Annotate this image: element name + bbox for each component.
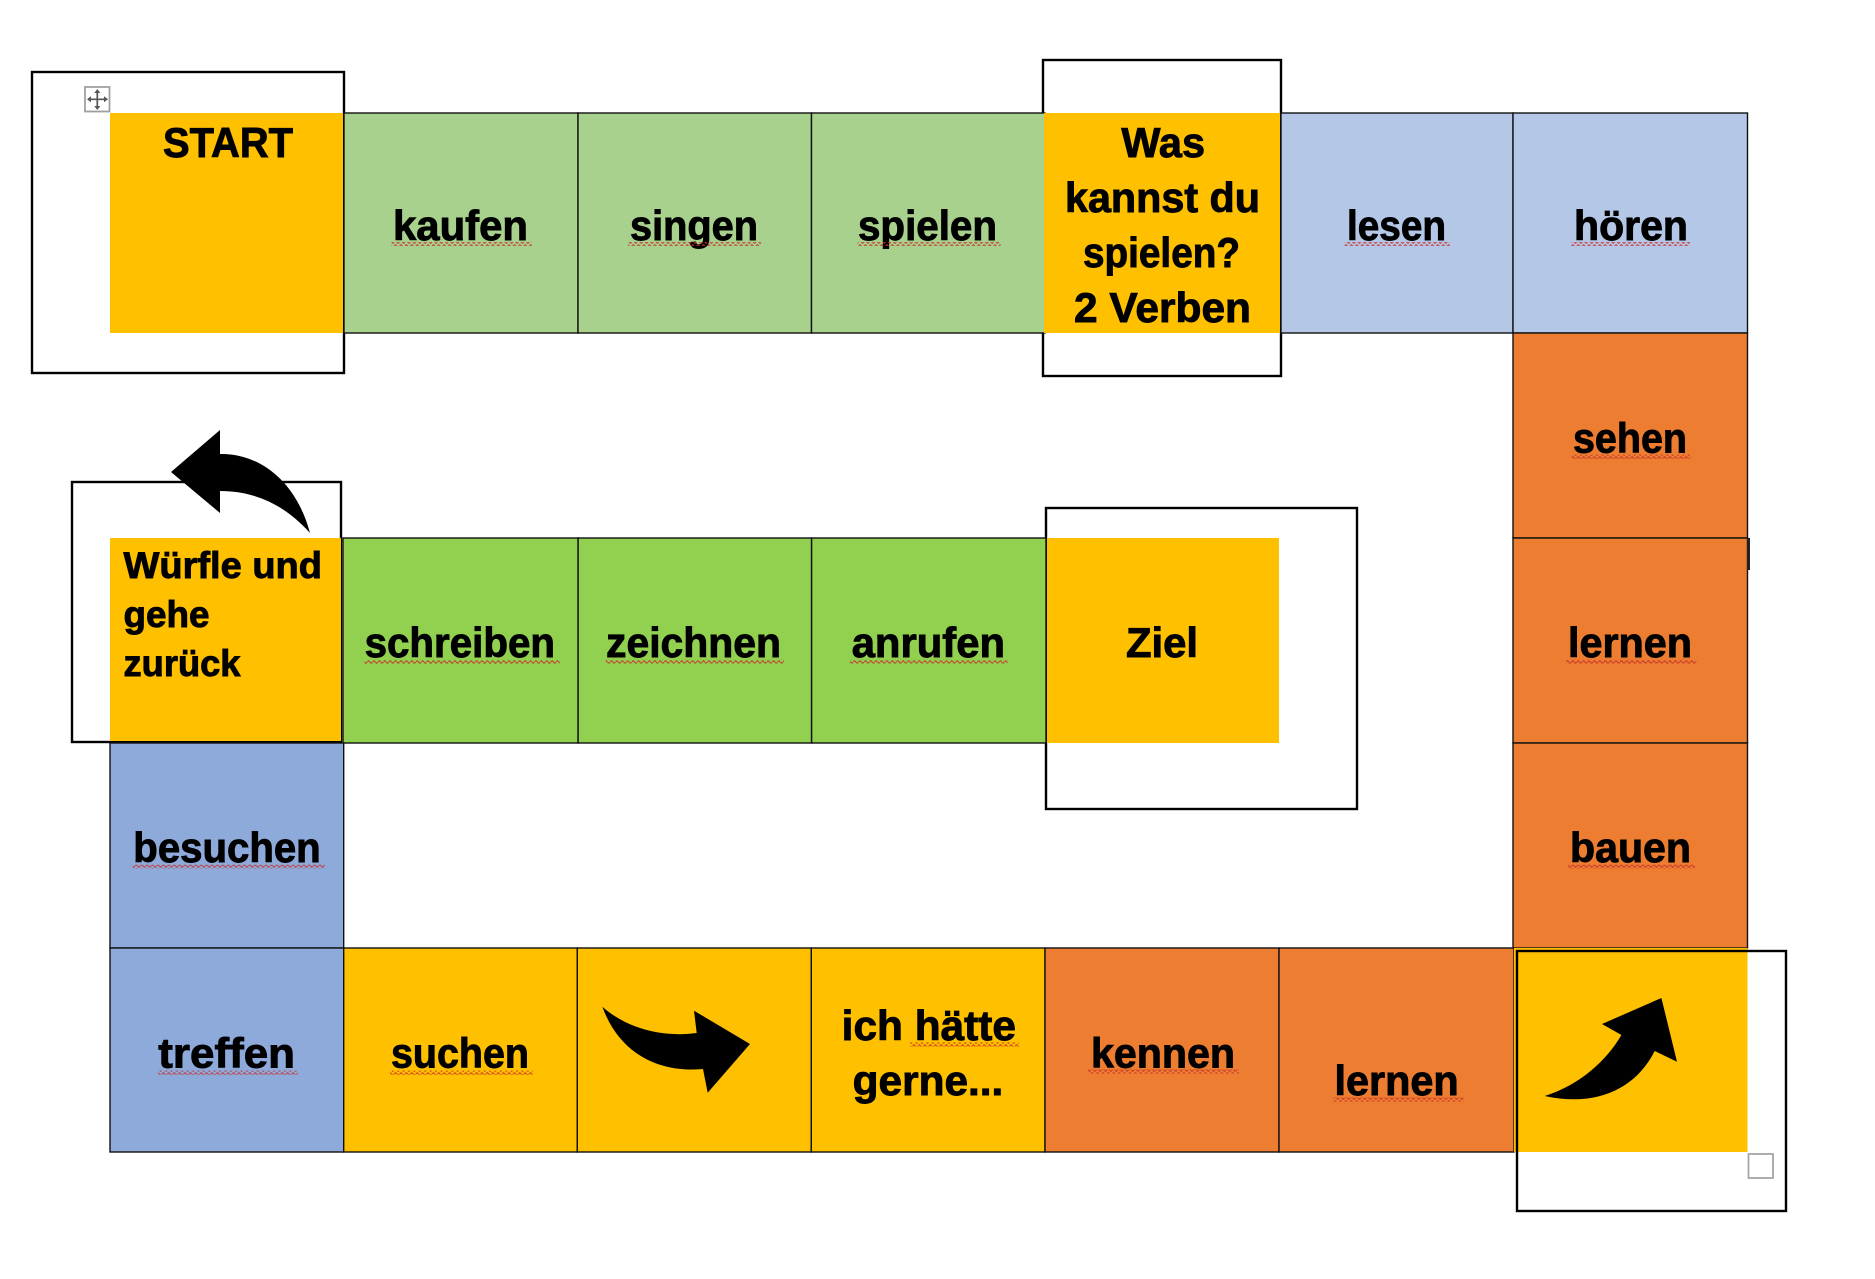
cell: Ziel: Ziel xyxy=(1126,619,1198,666)
cell: anrufen: anrufen xyxy=(852,619,1005,666)
cell: kaufen: kaufen xyxy=(393,202,528,249)
cell: singen xyxy=(578,113,812,333)
cell: Was kannst du spielen? 2 Verben: 2 Verben xyxy=(1074,284,1251,331)
cell: lernen: lernen xyxy=(1568,619,1692,666)
cell: lernen bottom: lernen xyxy=(1334,1057,1459,1104)
arrow: curved left xyxy=(171,430,310,533)
cell: Was kannst du spielen? 2 Verben: spielen? xyxy=(1083,229,1240,276)
cell: Würfle und gehe zurück xyxy=(110,538,341,741)
cell: ich hätte gerne: gerne... xyxy=(853,1057,1003,1104)
cell: lernen xyxy=(1513,538,1748,743)
cell: suchen xyxy=(344,948,577,1152)
question frame xyxy=(1043,60,1281,376)
cell: lesen: lesen xyxy=(1347,202,1446,249)
cell: schreiben: schreiben xyxy=(365,619,555,666)
cell: anrufen xyxy=(812,538,1046,743)
cell: zeichnen: zeichnen xyxy=(606,619,781,666)
cell: spielen: spielen xyxy=(858,202,997,249)
cell: corner arrow square xyxy=(1514,948,1748,1152)
cell: bauen xyxy=(1513,743,1748,948)
cell: Würfle und gehe zurück: zurück xyxy=(124,643,241,684)
cell: Was kannst du spielen? 2 Verben: Was xyxy=(1121,119,1205,166)
cell: sehen: sehen xyxy=(1573,415,1687,462)
cell: besuchen: besuchen xyxy=(133,824,321,871)
cell: suchen: suchen xyxy=(391,1030,529,1077)
cell: besuchen xyxy=(110,743,344,948)
cell: Würfle und gehe zurück: Würfle und xyxy=(124,545,322,586)
cell: ich hätte gerne xyxy=(811,948,1045,1152)
cell: treffen xyxy=(110,948,344,1152)
cell: Was kannst du spielen? 2 Verben: kannst du xyxy=(1065,174,1260,221)
cell: Was kannst du spielen? 2 Verben xyxy=(1044,113,1280,333)
start frame xyxy=(32,72,344,373)
cell: kennen: kennen xyxy=(1091,1030,1235,1077)
cell: Ziel xyxy=(1047,538,1279,743)
cell: hören xyxy=(1513,113,1748,333)
cell: kaufen xyxy=(344,113,578,333)
cell: arrow square xyxy=(577,948,811,1152)
marker tab xyxy=(1747,538,1750,570)
corner frame background xyxy=(1517,951,1786,1211)
cell: ich hätte gerne: ich hätte xyxy=(842,1002,1016,1049)
cell: Würfle und gehe zurück: gehe xyxy=(124,594,210,635)
cell: sehen xyxy=(1513,333,1748,538)
cell: singen: singen xyxy=(630,202,758,249)
cell: schreiben xyxy=(343,538,578,743)
cell: spielen xyxy=(812,113,1045,333)
cell: zeichnen xyxy=(578,538,812,743)
cell: START xyxy=(110,113,343,333)
icon: table resize handle xyxy=(1748,1154,1773,1178)
dice frame xyxy=(72,482,341,742)
arrow: curved up right xyxy=(1545,998,1677,1099)
cell: treffen: treffen xyxy=(158,1030,295,1077)
icon: table move handle xyxy=(85,87,110,112)
cell: bauen: bauen xyxy=(1570,824,1691,871)
arrow: curved right xyxy=(602,1007,750,1093)
goal frame xyxy=(1046,508,1357,809)
cell: lernen bottom xyxy=(1279,948,1514,1152)
corner frame outline xyxy=(1517,951,1786,1211)
cell: START: START xyxy=(163,119,293,166)
cell: kennen xyxy=(1045,948,1279,1152)
cell: hören: hören xyxy=(1574,202,1688,249)
cell: lesen xyxy=(1281,113,1513,333)
